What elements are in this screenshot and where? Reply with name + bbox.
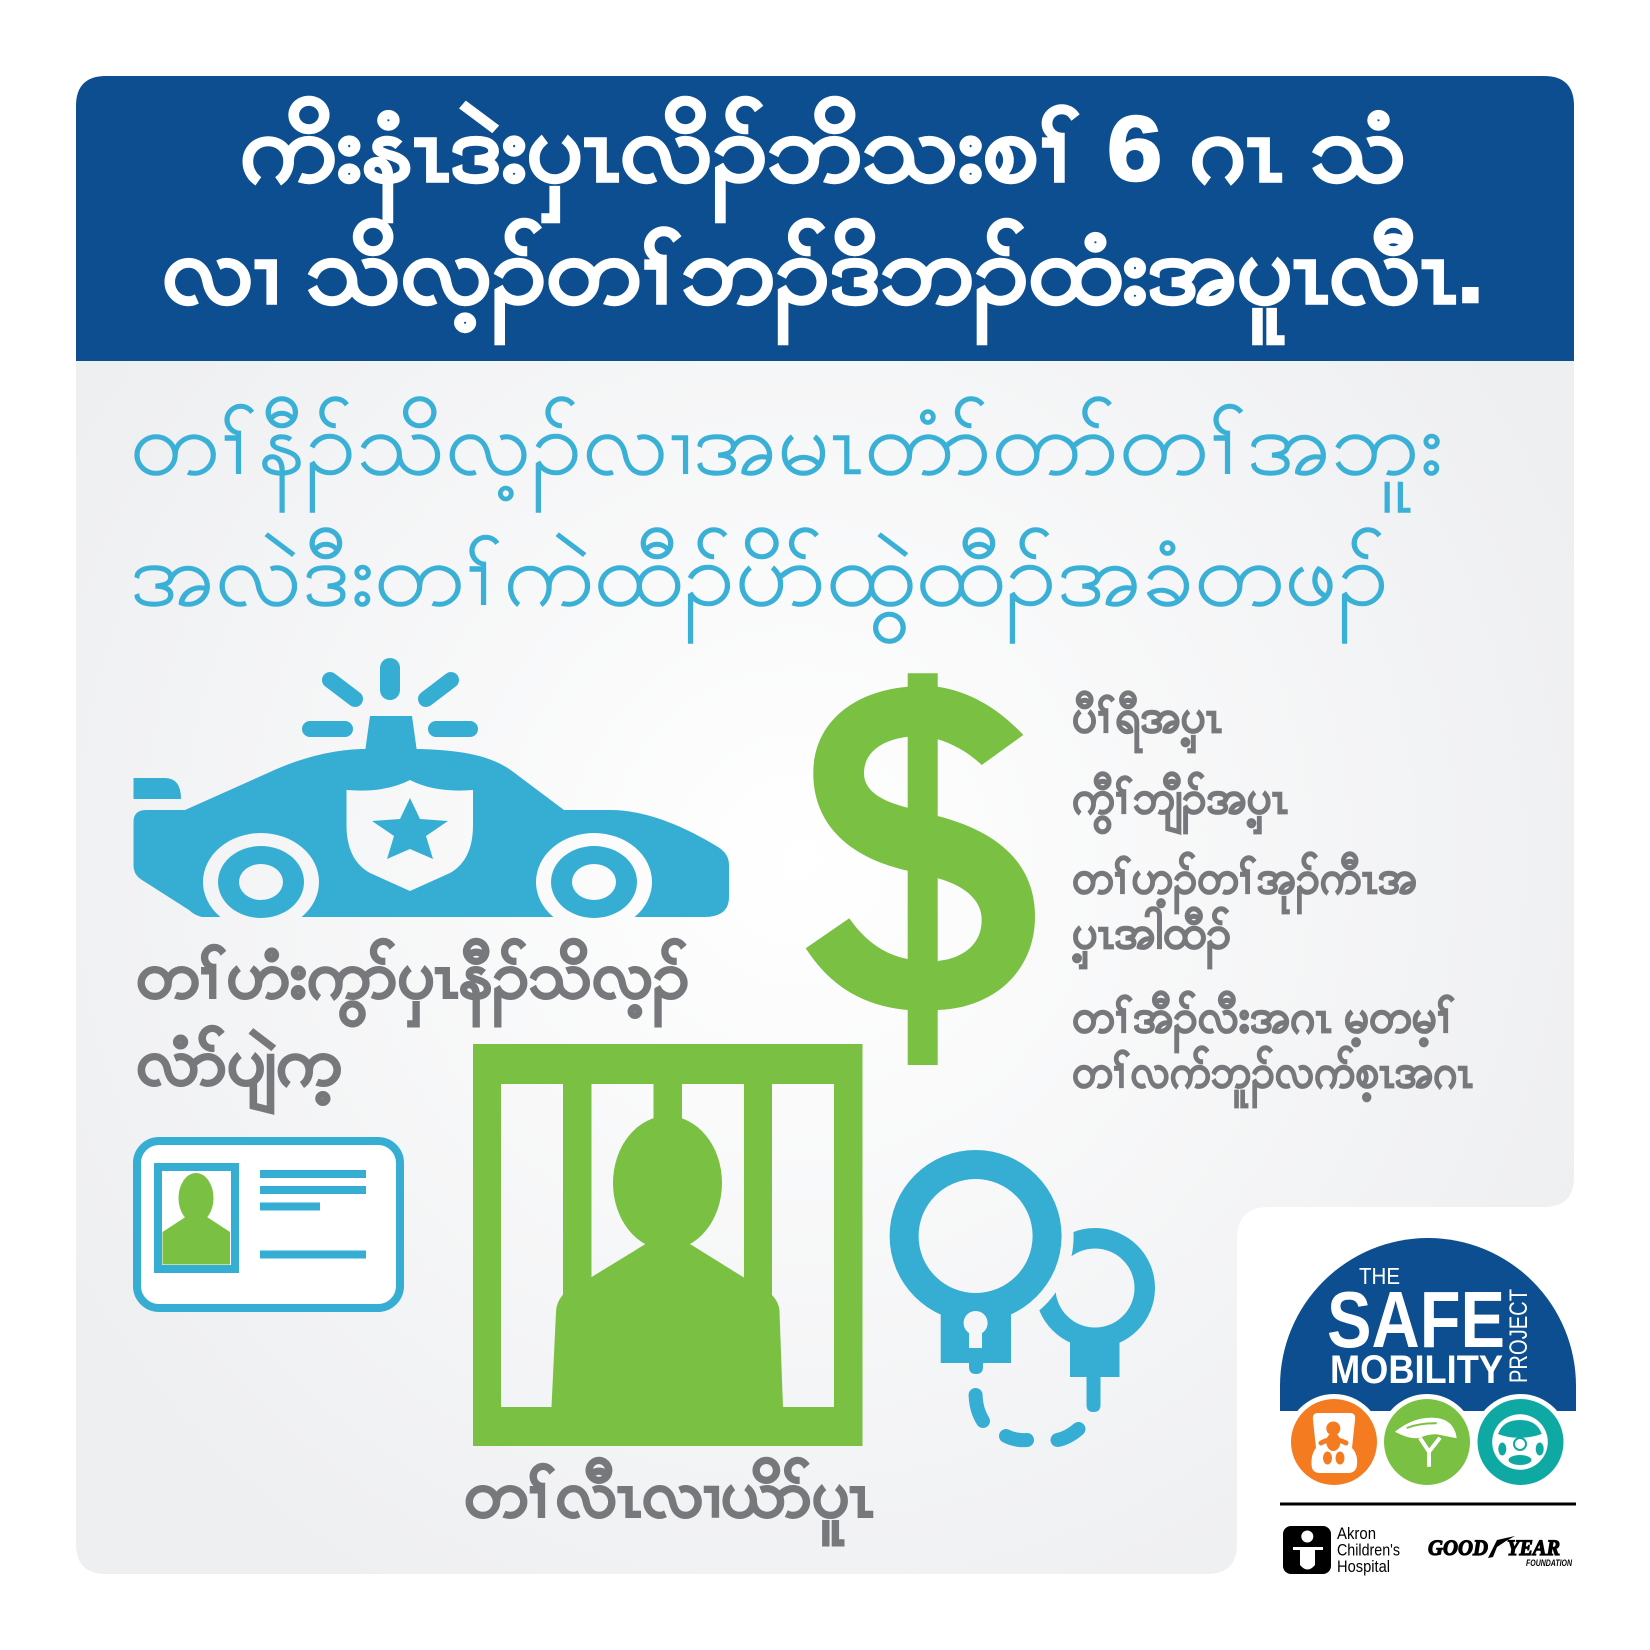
logo: Goodyear Foundation [1428, 1535, 1572, 1568]
list: financial consequences: ကွီၢ်ဘျီၣ်အပှ့ၤ [1072, 770, 1288, 835]
icon: child seat [1311, 1413, 1357, 1473]
subtitle: တၢ်နီၣ်သိလ့ၣ်လၢအမၤတံာ်တာ်တၢ်အဘူး [130, 394, 1443, 513]
label: driver license suspension: တၢ်ဟံးကွာ်ပှၤနီၣ်သိလ့ၣ် [136, 938, 689, 1026]
logo: Goodyear Foundation: GOOD [1428, 1535, 1488, 1560]
list: financial consequences: တၢ်အီၣ်လီးအဂၤ မ့တမ့ၢ် [1072, 989, 1455, 1054]
list: financial consequences: ပီၢ်ရီအပှ့ၤ [1072, 689, 1222, 754]
title [162, 98, 1484, 344]
icon: handcuffs [878, 1138, 1155, 1440]
logo: Akron Children's Hospital: Children's [1337, 1540, 1400, 1560]
icon: winged foot [1488, 1536, 1515, 1558]
icon: dollar sign [806, 673, 1035, 1065]
title: ကိးနံၤဒဲးပှၤလိၣ်ဘိသးစၢ် 6 ဂၤ သံ [240, 98, 1406, 222]
panel: background [76, 361, 1574, 1574]
title: လၢ သိလ့ၣ်တၢ်ဘၣ်ဒိဘၣ်ထံးအပူၤလီၤ. [162, 220, 1484, 344]
list: financial consequences: တၢ်ဟ့ၣ်တၢ်အုၣ်ကီၤအ [1072, 850, 1417, 915]
list: financial consequences: တၢ်လက်ဘူၣ်လက်စ့ၤအဂၤ [1072, 1044, 1473, 1109]
list: financial consequences: ပှ့ၤအါထီၣ် [1072, 905, 1231, 970]
logo: Goodyear Foundation: YEAR [1507, 1535, 1560, 1560]
icon: helmet [1395, 1418, 1457, 1467]
icon: police car [134, 658, 729, 937]
icon: steering wheel [1492, 1414, 1548, 1470]
header band [76, 76, 1574, 361]
label: driver license suspension: လံာ်ပျဲက့ [136, 1025, 342, 1114]
logo: The Safe Mobility Project: PROJECT [1505, 1289, 1533, 1383]
logo: Akron Children's Hospital: Hospital [1337, 1557, 1390, 1576]
label: driver license suspension [136, 938, 689, 1114]
logo: Akron Children's Hospital: Akron [1337, 1524, 1376, 1543]
list: financial consequences [1072, 689, 1473, 1109]
subtitle: အလဲဒီးတၢ်ကဲထီၣ်ပိာ်ထွဲထီၣ်အခံတဖၣ် [130, 525, 1389, 644]
logo: Goodyear Foundation: FOUNDATION [1526, 1558, 1572, 1568]
logo: The Safe Mobility Project: THE [1359, 1263, 1400, 1289]
icon: jail with person behind bars [473, 1044, 862, 1446]
logo: The Safe Mobility Project [1280, 1238, 1576, 1576]
logo: The Safe Mobility Project: MOBILITY [1330, 1348, 1503, 1392]
label: jail time: တၢ်လီၤလၢယိာ်ပူၤ [464, 1457, 874, 1545]
logo: The Safe Mobility Project: SAFE [1327, 1275, 1505, 1364]
subtitle [130, 394, 1443, 644]
logo: Akron Children's Hospital [1283, 1524, 1400, 1576]
icon: license card [137, 1141, 400, 1308]
